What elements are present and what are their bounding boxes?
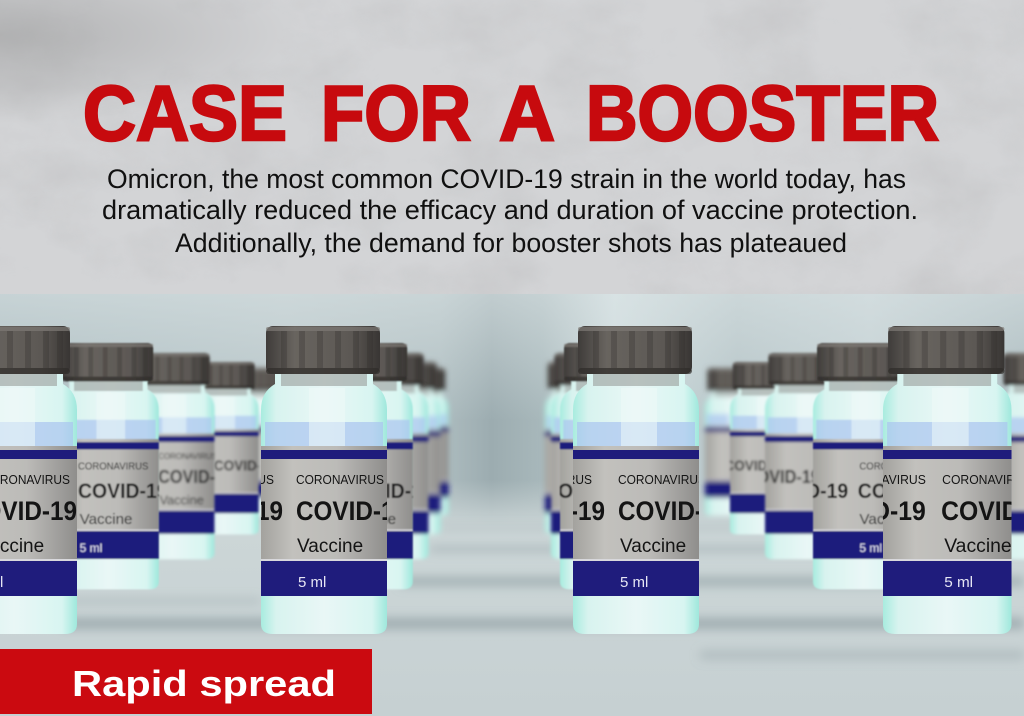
vial 2: 5 ml	[298, 574, 326, 591]
vial 2	[261, 326, 387, 634]
intro text: Omicron, the most common COVID-19 strain in the world today, has	[107, 164, 906, 194]
right rear vials, blurred: CORONAVIRUS	[859, 461, 930, 472]
vials behind centre-left vial: COVID-19	[343, 478, 433, 503]
photo: rows of vaccine vials	[0, 294, 1024, 665]
vial 3	[573, 326, 699, 634]
vial 2: COVID-19	[296, 496, 408, 526]
vials behind centre-right vial: COVID-19	[544, 478, 634, 503]
intro text	[102, 164, 918, 258]
section label: rapid spread	[0, 649, 372, 714]
vial 2: Vaccine	[297, 536, 363, 557]
vial 3: 5 ml	[620, 574, 648, 591]
right rear vials, blurred: COVID-19	[759, 478, 848, 503]
vial 4: CORONAVIRUS	[836, 472, 926, 487]
right rear vials, blurred: COVID-19	[858, 478, 947, 503]
title: FOR	[321, 69, 471, 157]
vial 2: COVID-19	[171, 496, 283, 526]
right rear vials, blurred	[705, 343, 1024, 589]
intro text: dramatically reduced the efficacy and duration of vaccine protection.	[102, 195, 918, 225]
vials behind centre-left vial	[373, 342, 453, 590]
vial 3: COVID-19	[493, 496, 605, 526]
title: CASE	[83, 69, 287, 157]
left rear vials, blurred: COVID-19	[158, 467, 233, 487]
photo background	[0, 294, 1024, 716]
left rear vials, blurred: CORONAVIRUS	[78, 461, 148, 472]
title: A	[499, 69, 555, 157]
vial 4: 5 ml	[944, 574, 973, 591]
left rear vials, blurred: 5 ml	[80, 541, 102, 555]
vial 2: CORONAVIRUS	[186, 472, 274, 487]
right rear vials, blurred: 5 ml	[859, 541, 882, 555]
vial 3: COVID-19	[618, 496, 730, 526]
vial 3: Vaccine	[620, 536, 686, 557]
left rear vials, blurred	[58, 343, 292, 589]
right rear vials, blurred: Vaccine	[859, 511, 912, 528]
vial 4	[883, 326, 1012, 634]
vial 3: CORONAVIRUS	[504, 472, 592, 487]
section label: rapid spread: Rapid spread	[72, 663, 336, 704]
right rear vials, blurred: COVID-19	[724, 458, 787, 475]
vials behind centre-right vial	[540, 342, 587, 590]
vial 2: CORONAVIRUS	[296, 472, 384, 487]
title: BOOSTER	[586, 69, 939, 157]
vials behind centre-left vial: Vaccine	[343, 511, 396, 528]
left rear vials, blurred: COVID-19	[214, 458, 276, 475]
left rear vials, blurred: Vaccine	[80, 511, 133, 528]
left rear vials, blurred: COVID-19	[78, 478, 168, 503]
right rear vials, blurred: COVID-19	[745, 467, 820, 487]
title	[83, 69, 939, 157]
left rear vials, blurred: Vaccine	[159, 492, 204, 507]
vial 4: COVID-19	[812, 495, 926, 526]
vial 4: Vaccine	[944, 536, 1012, 557]
vial 3: CORONAVIRUS	[618, 472, 706, 487]
left rear vials, blurred: CORONAVIRUS	[158, 451, 217, 461]
intro text: Additionally, the demand for booster shots has plateaued	[175, 228, 847, 258]
background: grey marble banner	[0, 0, 1024, 294]
vial 1	[0, 326, 77, 634]
